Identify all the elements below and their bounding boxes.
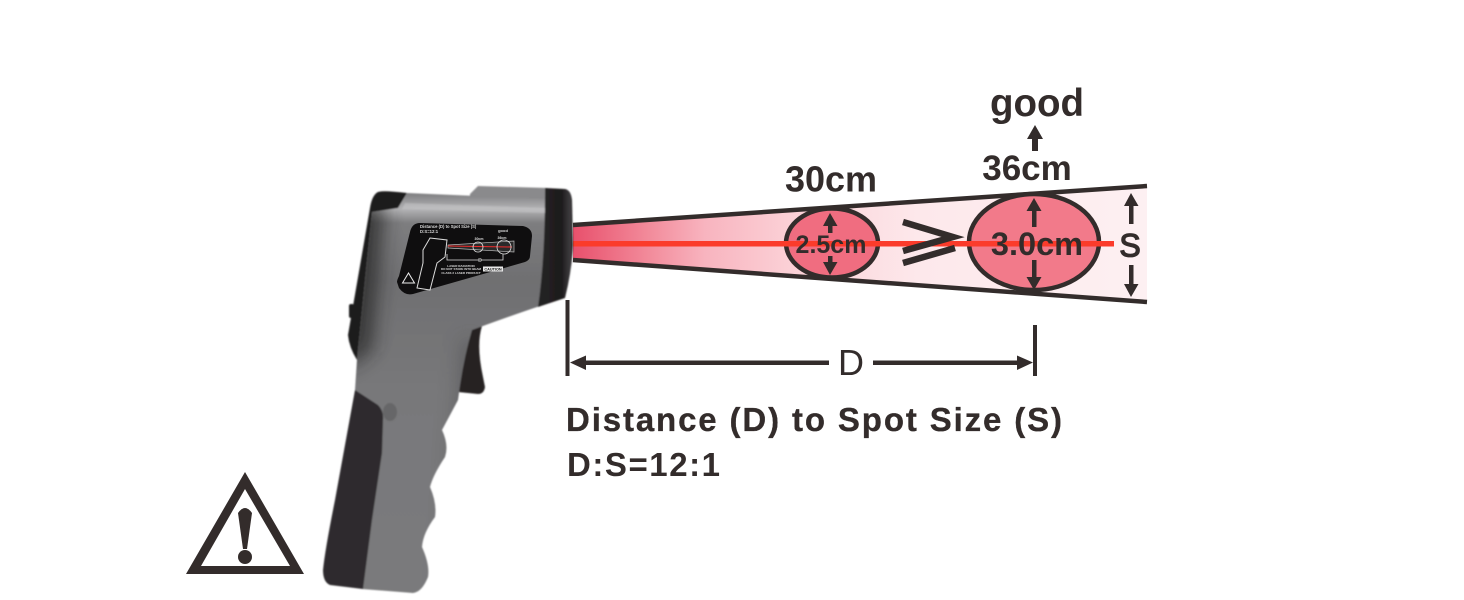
top sight ridge (470, 186, 548, 201)
near spot label and arrows (796, 213, 866, 275)
front black nose (538, 188, 573, 307)
infographic canvas (186, 88, 1148, 594)
arrow up to good (1027, 125, 1043, 151)
gun label plate: good (498, 228, 508, 233)
gun label plate (397, 223, 532, 294)
laser line (573, 241, 1114, 246)
label 36cm: 36cm (982, 149, 1072, 188)
ratio D:S=12:1: D:S=12:1 (567, 446, 720, 483)
far spot label and arrows (991, 198, 1083, 290)
trigger (458, 326, 485, 394)
spot size S marker: S (1119, 228, 1141, 264)
label 30cm: 30cm (785, 158, 877, 200)
black grip panel (323, 390, 383, 589)
near spot label and arrows: 2.5cm (796, 231, 866, 259)
gun label plate: D (478, 258, 482, 264)
gun label plate: 30cm (475, 237, 483, 241)
beam cone (573, 186, 1147, 302)
gun label plate: Distance (D) to Spot Size (S) (420, 224, 477, 229)
far spot ellipse (969, 194, 1099, 290)
greater-or-equal symbol (903, 222, 955, 263)
near spot ellipse (786, 208, 878, 278)
label good: good (990, 82, 1084, 125)
gun label plate: LASER RADIATION (447, 264, 475, 268)
heading: distance to spot size: Distance (D) to Spot Size (S) (566, 401, 1062, 438)
gun label plate: CAUTION (484, 268, 502, 272)
rear black bumper (348, 191, 407, 360)
distance D dimension: D (838, 342, 864, 383)
gun label plate: D:S=12:1 (420, 229, 439, 234)
gun label plate: DO NOT STARE INTO BEAM (441, 267, 482, 271)
body shading (356, 208, 468, 410)
thermometer gun (323, 186, 573, 600)
icon: warning triangle (186, 472, 304, 574)
top highlight (402, 203, 545, 213)
far spot label and arrows: 3.0cm (991, 226, 1083, 262)
distance D dimension (566, 300, 1037, 383)
spot size S marker (1119, 193, 1141, 297)
rear button (349, 304, 354, 318)
grip thumb shade (383, 403, 397, 421)
gun label plate: CLASS 2 LASER PRODUCT (441, 271, 481, 275)
gun label plate: 36cm (498, 236, 506, 240)
main body and grip (355, 193, 548, 593)
